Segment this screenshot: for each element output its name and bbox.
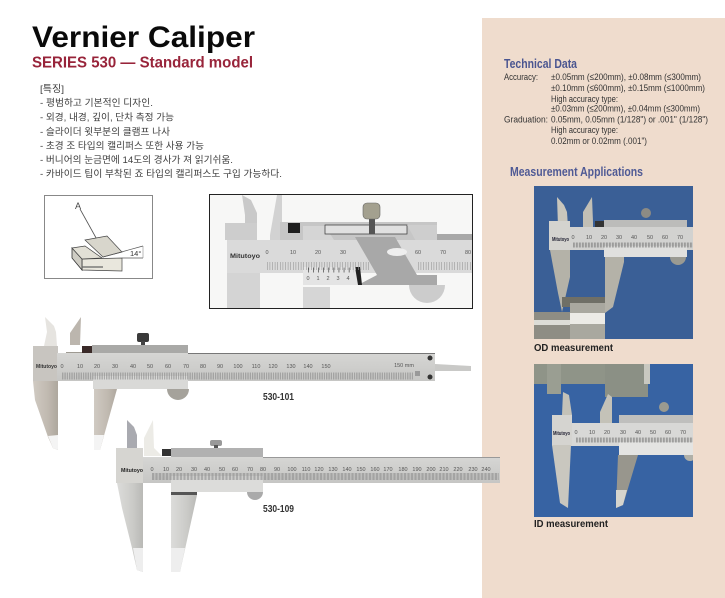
label: 530-109: 530-109 bbox=[263, 504, 294, 515]
photo: ID measurement: 30 bbox=[620, 430, 626, 436]
caliper: model 530-101: 70 bbox=[183, 364, 189, 370]
photo: ID measurement: 60 bbox=[665, 430, 671, 436]
caliper: model 530-109: 140 bbox=[342, 467, 352, 473]
caliper: model 530-101: 20 bbox=[94, 364, 100, 370]
caliper: model 530-101: 90 bbox=[217, 364, 223, 370]
photo: vernier close-up: 0 bbox=[306, 276, 310, 282]
caliper: model 530-109: 130 bbox=[328, 467, 338, 473]
caliper: model 530-101: 100 bbox=[233, 364, 243, 370]
caliper: model 530-109 bbox=[116, 420, 500, 572]
caliper: model 530-109: 110 bbox=[302, 467, 310, 473]
label: 530-101: 530-101 bbox=[263, 392, 294, 403]
photo: vernier close-up bbox=[210, 194, 472, 308]
photo: ID measurement: 0 bbox=[574, 430, 578, 436]
photo: ID measurement: Mitutoyo bbox=[553, 431, 570, 437]
caliper: model 530-101: 0 bbox=[60, 364, 64, 370]
caliper: model 530-109: 100 bbox=[287, 467, 297, 473]
photo: OD measurement: Mitutoyo bbox=[552, 237, 569, 243]
caliper: model 530-109: 50 bbox=[219, 467, 225, 473]
caliper: model 530-109: 120 bbox=[314, 467, 324, 473]
text block: technical data bbox=[504, 72, 708, 147]
caliper: model 530-109: 190 bbox=[412, 467, 422, 473]
text block: technical data: ±0.03mm (≤200mm), ±0.04mm (≤300mm) bbox=[551, 104, 700, 114]
photo: OD measurement: 30 bbox=[616, 235, 622, 241]
photo: vernier close-up: 20 bbox=[315, 250, 321, 256]
text block: technical data: ±0.05mm (≤200mm), ±0.08mm (≤300mm) bbox=[551, 72, 701, 83]
caliper: model 530-109: 220 bbox=[453, 467, 463, 473]
caliper: model 530-109: 210 bbox=[439, 467, 449, 473]
caliper: model 530-109: 60 bbox=[232, 467, 238, 473]
text block: Korean feature list: [특징] bbox=[40, 84, 64, 95]
caliper: model 530-109: Mitutoyo bbox=[121, 468, 144, 474]
photo: ID measurement: 10 bbox=[589, 430, 595, 436]
caliper: model 530-109: 240 bbox=[481, 467, 491, 473]
diagram: 14 degree vernier slope bbox=[44, 196, 152, 278]
diagram: 14 degree vernier slope: 14° bbox=[130, 249, 141, 258]
caliper: model 530-101: 130 bbox=[286, 364, 296, 370]
text block: technical data: High accuracy type: bbox=[551, 125, 618, 136]
caliper: model 530-101: 140 bbox=[303, 364, 313, 370]
caliper: model 530-101: Mitutoyo bbox=[36, 364, 58, 370]
caliper: model 530-109: 170 bbox=[383, 467, 393, 473]
photo: ID measurement: 20 bbox=[604, 430, 610, 436]
heading: Measurement Applications: Measurement Applications bbox=[510, 164, 643, 179]
text block: technical data: Accuracy: bbox=[504, 72, 538, 83]
caliper: model 530-109: 10 bbox=[163, 467, 169, 473]
caliper: model 530-109: 90 bbox=[274, 467, 280, 473]
photo: vernier close-up: 60 bbox=[415, 250, 421, 256]
text block: Korean feature list: - 슬라이더 윗부분의 클램프 나사 bbox=[40, 126, 170, 138]
photo: ID measurement bbox=[534, 364, 696, 517]
text block: Korean feature list: - 버니어의 눈금면에 14도의 경사가 져 읽기쉬움. bbox=[40, 154, 233, 166]
photo: OD measurement: 60 bbox=[662, 235, 668, 241]
photo: vernier close-up: 10 bbox=[290, 250, 296, 256]
text block: Korean feature list: - 외경, 내경, 깊이, 단차 측정 가능 bbox=[40, 112, 174, 124]
photo: OD measurement: 40 bbox=[631, 235, 637, 241]
caliper: model 530-101 bbox=[33, 317, 471, 450]
photo: vernier close-up: 70 bbox=[440, 250, 446, 256]
photo: ID measurement: 50 bbox=[650, 430, 656, 436]
text block: technical data: Graduation: bbox=[504, 114, 548, 126]
caption: OD measurement: OD measurement bbox=[534, 343, 614, 354]
photo: vernier close-up: 80 bbox=[465, 250, 471, 256]
caliper: model 530-109: 40 bbox=[204, 467, 210, 473]
photo: OD measurement: 0 bbox=[571, 235, 575, 241]
caliper: model 530-109: 80 bbox=[260, 467, 266, 473]
photo: OD measurement: 70 bbox=[677, 235, 683, 241]
caliper: model 530-109: 30 bbox=[191, 467, 197, 473]
caliper: model 530-101: 120 bbox=[268, 364, 278, 370]
photo: vernier close-up: Mitutoyo bbox=[230, 253, 260, 260]
photo: ID measurement: 70 bbox=[680, 430, 686, 436]
photo: vernier close-up: 0 bbox=[265, 250, 269, 256]
photo: vernier close-up: 4 bbox=[346, 276, 350, 282]
caliper: model 530-109: 230 bbox=[468, 467, 478, 473]
photo: OD measurement: 20 bbox=[601, 235, 607, 241]
title: Vernier Caliper bbox=[32, 21, 255, 54]
caliper: model 530-109: 160 bbox=[370, 467, 380, 473]
photo: vernier close-up: 30 bbox=[340, 250, 346, 256]
caliper: model 530-109: 150 bbox=[356, 467, 366, 473]
caliper: model 530-101: 30 bbox=[112, 364, 118, 370]
text block: Korean feature list: - 카바이드 팁이 부착된 죠 타입의 캘리퍼스도 구입 가능하다. bbox=[40, 168, 282, 180]
photo: vernier close-up: 1 bbox=[316, 276, 320, 282]
text block: technical data: High accuracy type: bbox=[551, 94, 618, 105]
text block: Korean feature list: - 초경 조 타입의 캘리퍼스 또한 사용 가능 bbox=[40, 140, 204, 152]
caption: ID measurement: ID measurement bbox=[534, 519, 609, 530]
caliper: model 530-101: 80 bbox=[200, 364, 206, 370]
caliper: model 530-101: 60 bbox=[165, 364, 171, 370]
caliper: model 530-101: 150 mm bbox=[394, 363, 414, 369]
caliper: model 530-109: 70 bbox=[247, 467, 253, 473]
heading: Technical Data: Technical Data bbox=[504, 57, 578, 71]
photo: vernier close-up: 3 bbox=[336, 276, 340, 282]
photo: OD measurement bbox=[534, 186, 693, 339]
subtitle: SERIES 530 — Standard model bbox=[32, 54, 253, 72]
photo: vernier close-up: 2 bbox=[326, 276, 330, 282]
caliper: model 530-109: 20 bbox=[176, 467, 182, 473]
caliper: model 530-101: 40 bbox=[130, 364, 136, 370]
caliper: model 530-101: 110 bbox=[252, 364, 260, 370]
caliper: model 530-109: 200 bbox=[426, 467, 436, 473]
caliper: model 530-109: 180 bbox=[398, 467, 408, 473]
text block: technical data: 0.02mm or 0.02mm (.001") bbox=[551, 136, 647, 147]
caliper: model 530-109: 0 bbox=[150, 467, 154, 473]
text block: Korean feature list: - 평범하고 기본적인 디자인. bbox=[40, 97, 153, 109]
caliper: model 530-101: 10 bbox=[77, 364, 83, 370]
photo: OD measurement: 10 bbox=[586, 235, 592, 241]
diagram: 14 degree vernier slope: A bbox=[75, 201, 81, 211]
caliper: model 530-101: 150 bbox=[321, 364, 331, 370]
caliper: model 530-101: 50 bbox=[147, 364, 153, 370]
text block: Korean feature list bbox=[40, 84, 282, 180]
photo: ID measurement: 40 bbox=[635, 430, 641, 436]
photo: OD measurement: 50 bbox=[647, 235, 653, 241]
panel: right sidebar background bbox=[482, 18, 725, 598]
